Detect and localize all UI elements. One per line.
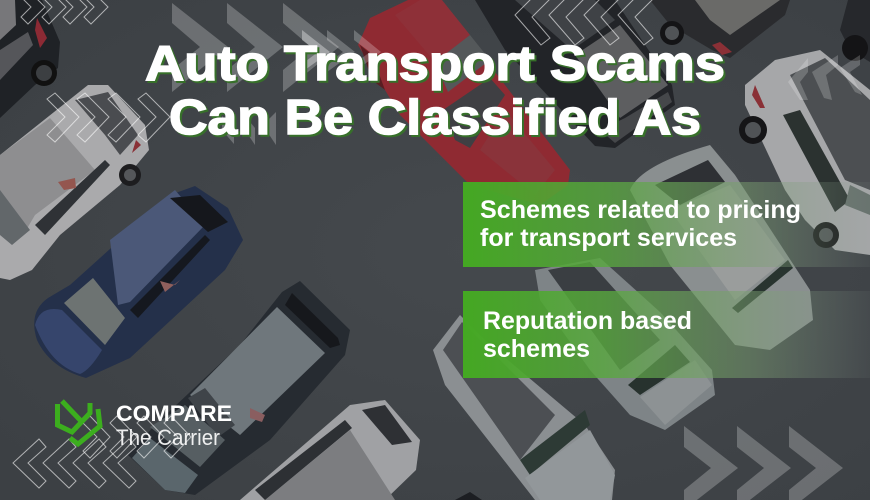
panel: reputation schemes: Reputation based (483, 307, 692, 335)
outlined chevrons: left middle (47, 93, 170, 142)
icon: logo mark (58, 401, 100, 444)
car: silver sedan behind panels (630, 145, 813, 350)
car: black top-left (0, 0, 60, 118)
title: Can Be Classified As (169, 91, 701, 145)
outlined chevrons: bottom left (13, 416, 191, 488)
panel: reputation schemes (463, 291, 870, 378)
decorative filled chevrons: top centre (172, 3, 381, 145)
decorative filled chevrons: bottom right (684, 426, 843, 500)
car: far right corner (840, 0, 870, 62)
logo: Compare The Carrier (58, 401, 232, 450)
panel: pricing schemes: for transport services (480, 224, 737, 252)
car: white bottom (240, 400, 420, 500)
outlined chevrons: top left (21, 0, 108, 24)
car: dark SUV top centre (475, 0, 675, 148)
car: red SUV (358, 0, 570, 205)
car: blue sedan (34, 186, 243, 378)
car: silver sedan bottom (433, 315, 615, 500)
car: dark bottom fragment (455, 492, 482, 500)
logo wordmark: The Carrier (116, 425, 220, 450)
panel: pricing schemes: Schemes related to pricing (480, 196, 801, 224)
logo wordmark: COMPARE (116, 401, 232, 426)
car: silver sedan middle (535, 258, 715, 430)
decorative filled chevrons: top right (788, 55, 862, 100)
car: dark top right (650, 0, 790, 58)
panel: reputation schemes: schemes (483, 335, 590, 363)
car: white crossover right (739, 50, 870, 255)
title: Auto Transport Scams (145, 37, 725, 91)
title (145, 37, 725, 145)
panel: pricing schemes (463, 182, 870, 267)
logo wordmark (116, 401, 232, 450)
car: silver minivan (128, 281, 350, 495)
outlined chevrons: top centre (515, 0, 655, 45)
car: white SUV left (0, 85, 149, 280)
